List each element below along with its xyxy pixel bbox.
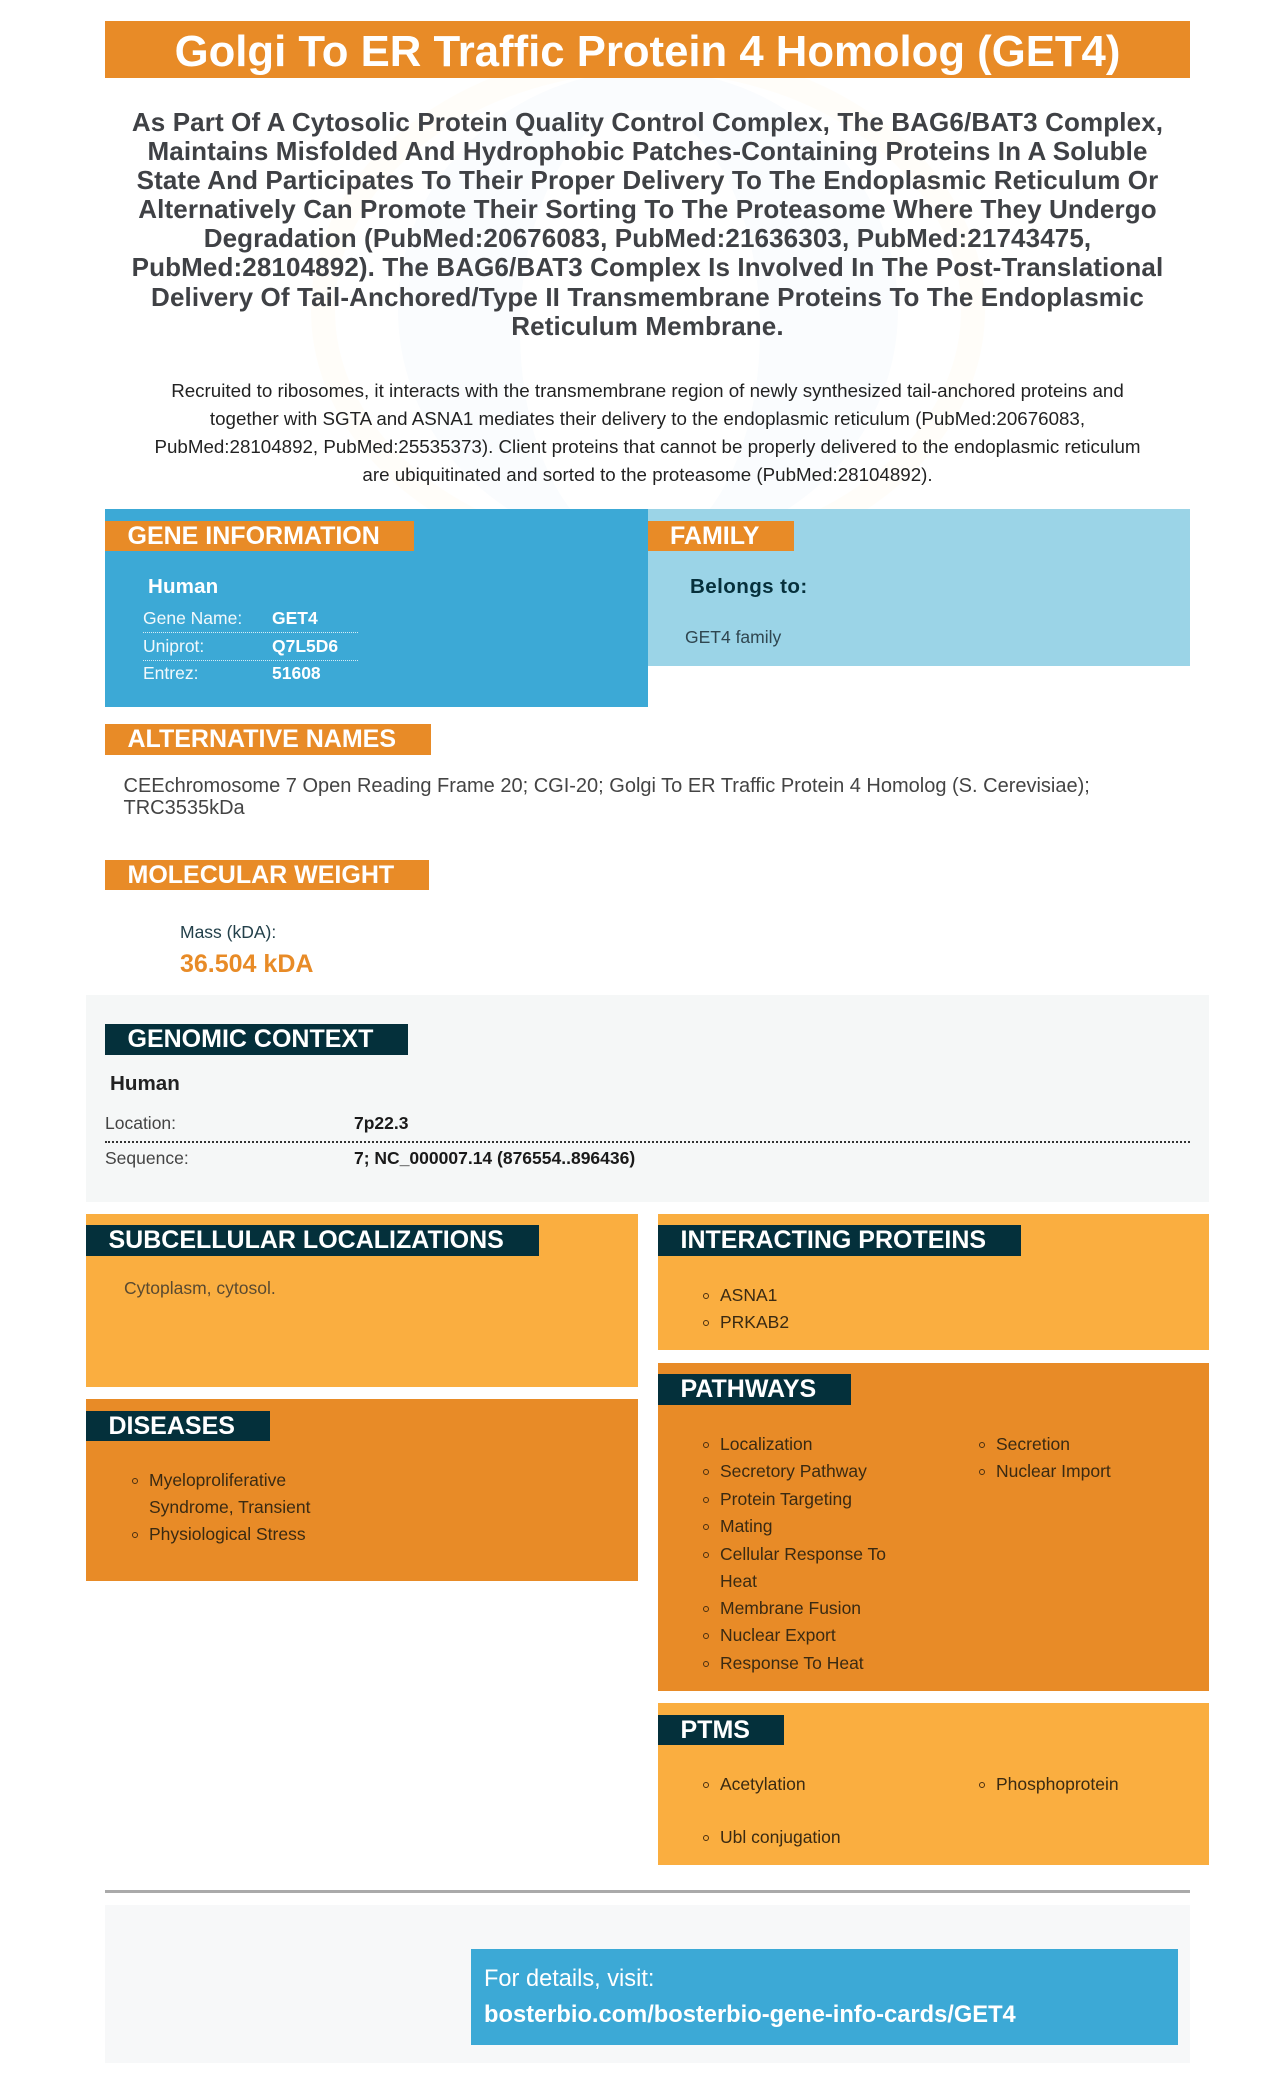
uniprot row: Q7L5D6 <box>272 636 338 656</box>
entrez row <box>143 663 321 683</box>
summary heading: Alternatively Can Promote Their Sorting To The Proteasome Where They Undergo <box>138 194 1157 224</box>
sequence row: 7; NC_000007.14 (876554..896436) <box>354 1148 635 1168</box>
heading: alternative names: ALTERNATIVE NAMES <box>128 725 396 753</box>
panel: ptms <box>658 1703 1209 1865</box>
summary heading: Delivery Of Tail-Anchored/Type II Transmembrane Proteins To The Endoplasmic <box>151 282 1144 312</box>
summary heading: State And Participates To Their Proper Delivery To The Endoplasmic Reticulum Or <box>137 165 1158 195</box>
heading: genomic context: GENOMIC CONTEXT <box>128 1025 373 1053</box>
mass value: 36.504 kDA <box>180 950 313 978</box>
pathway list column 1: Protein Targeting <box>720 1489 852 1509</box>
panel: genomic context <box>86 995 1209 1202</box>
protein list <box>703 1285 789 1332</box>
sequence row <box>105 1148 635 1168</box>
entrez row: Entrez: <box>143 663 198 683</box>
description paragraph <box>154 380 1141 485</box>
summary heading <box>132 107 1163 341</box>
gene name row: GET4 <box>272 608 318 628</box>
uniprot row <box>143 635 358 661</box>
panel: gene information <box>105 509 648 707</box>
ptm list column 2: Phosphoprotein <box>996 1774 1119 1794</box>
pathway list column 2: Nuclear Import <box>996 1461 1111 1481</box>
summary heading: Maintains Misfolded And Hydrophobic Patches-Containing Proteins In A Soluble <box>147 136 1148 166</box>
description paragraph: are ubiquitinated and sorted to the proteasome (PubMed:28104892). <box>362 464 933 485</box>
pathway list column 1: Localization <box>720 1434 812 1454</box>
title: Golgi To ER Traffic Protein 4 Homolog (GET4) <box>175 27 1120 76</box>
pathway list column 1: Response To Heat <box>720 1653 864 1673</box>
summary heading: Degradation (PubMed:20676083, PubMed:21636303, PubMed:21743475, <box>204 223 1091 253</box>
protein list: PRKAB2 <box>720 1312 789 1332</box>
pathway list column 2: Secretion <box>996 1434 1070 1454</box>
heading: pathways: PATHWAYS <box>680 1375 816 1403</box>
summary heading: Reticulum Membrane. <box>511 311 784 341</box>
ptm list column 1 <box>703 1774 841 1847</box>
belongs to label: Belongs to: <box>690 575 808 598</box>
heading: pathways <box>658 1374 851 1405</box>
panel: diseases <box>86 1399 638 1581</box>
pathway list column 1: Heat <box>720 1571 757 1591</box>
pathway list column 1: Mating <box>720 1516 773 1536</box>
heading: interacting proteins: INTERACTING PROTEINS <box>680 1226 986 1254</box>
heading: gene information: GENE INFORMATION <box>128 522 380 550</box>
description paragraph: Recruited to ribosomes, it interacts with the transmembrane region of newly synthesized tail-anchored proteins and <box>171 380 1124 401</box>
callout label: For details, visit: <box>484 1966 654 1992</box>
panel: interacting proteins <box>658 1214 1209 1350</box>
gene name row <box>143 607 358 633</box>
alternative names text: TRC3535kDa <box>124 797 245 819</box>
pathway list column 1: Nuclear Export <box>720 1625 836 1645</box>
footer divider <box>105 1890 1190 1893</box>
description paragraph: together with SGTA and ASNA1 mediates their delivery to the endoplasmic reticulum (PubMed:20676083, <box>210 408 1085 429</box>
species label: Human <box>148 575 218 598</box>
panel: family <box>648 509 1190 666</box>
heading: subcellular localizations: SUBCELLULAR LOCALIZATIONS <box>108 1226 504 1254</box>
description paragraph: PubMed:28104892, PubMed:25535373). Client proteins that cannot be properly delivered to the endoplasmic reticulum <box>154 436 1141 457</box>
sequence row: Sequence: <box>105 1148 189 1168</box>
disease list: Physiological Stress <box>149 1524 306 1544</box>
location row <box>105 1112 1190 1143</box>
family name: GET4 family <box>685 627 781 647</box>
heading: family <box>648 521 794 551</box>
summary heading: As Part Of A Cytosolic Protein Quality Control Complex, The BAG6/BAT3 Complex, <box>132 107 1163 137</box>
alternative names text: CEEchromosome 7 Open Reading Frame 20; CGI-20; Golgi To ER Traffic Protein 4 Homolog (S. Cerevisiae); <box>124 775 1090 797</box>
callout url: bosterbio.com/bosterbio-gene-info-cards/GET4 <box>484 2002 1016 2028</box>
heading: diseases <box>86 1411 270 1441</box>
uniprot row: Uniprot: <box>143 636 204 656</box>
summary heading: PubMed:28104892). The BAG6/BAT3 Complex Is Involved In The Post-Translational <box>132 252 1163 282</box>
entrez row: 51608 <box>272 663 321 683</box>
footer panel <box>105 1905 1190 2063</box>
heading: family: FAMILY <box>670 522 759 550</box>
heading: molecular weight: MOLECULAR WEIGHT <box>128 861 394 889</box>
location row: 7p22.3 <box>354 1113 408 1133</box>
ptm list column 1: Ubl conjugation <box>720 1827 841 1847</box>
heading: ptms: PTMS <box>680 1716 750 1744</box>
pathway list column 1: Membrane Fusion <box>720 1598 861 1618</box>
disease list: Syndrome, Transient <box>149 1497 310 1517</box>
ptm list column 1: Acetylation <box>720 1774 806 1794</box>
watermark logo <box>300 70 1000 520</box>
pathway list column 1 <box>703 1434 886 1673</box>
localization text: Cytoplasm, cytosol. <box>124 1278 276 1298</box>
gene name row: Gene Name: <box>143 608 242 628</box>
disease list: Myeloproliferative <box>149 1470 286 1490</box>
mass label: Mass (kDA): <box>180 922 276 942</box>
panel: subcellular localizations <box>86 1214 638 1387</box>
pathway list column 1: Secretory Pathway <box>720 1461 867 1481</box>
panel: pathways <box>658 1363 1209 1691</box>
disease list <box>132 1470 310 1544</box>
location row: Location: <box>105 1113 176 1133</box>
pathway list column 2 <box>979 1434 1111 1481</box>
pathway list column 1: Cellular Response To <box>720 1544 886 1564</box>
heading: ptms <box>658 1715 784 1745</box>
alternative names text <box>124 775 1090 819</box>
protein list: ASNA1 <box>720 1285 777 1305</box>
heading: diseases: DISEASES <box>108 1412 235 1440</box>
callout: details link <box>471 1949 1178 2045</box>
species label: Human <box>110 1072 180 1095</box>
